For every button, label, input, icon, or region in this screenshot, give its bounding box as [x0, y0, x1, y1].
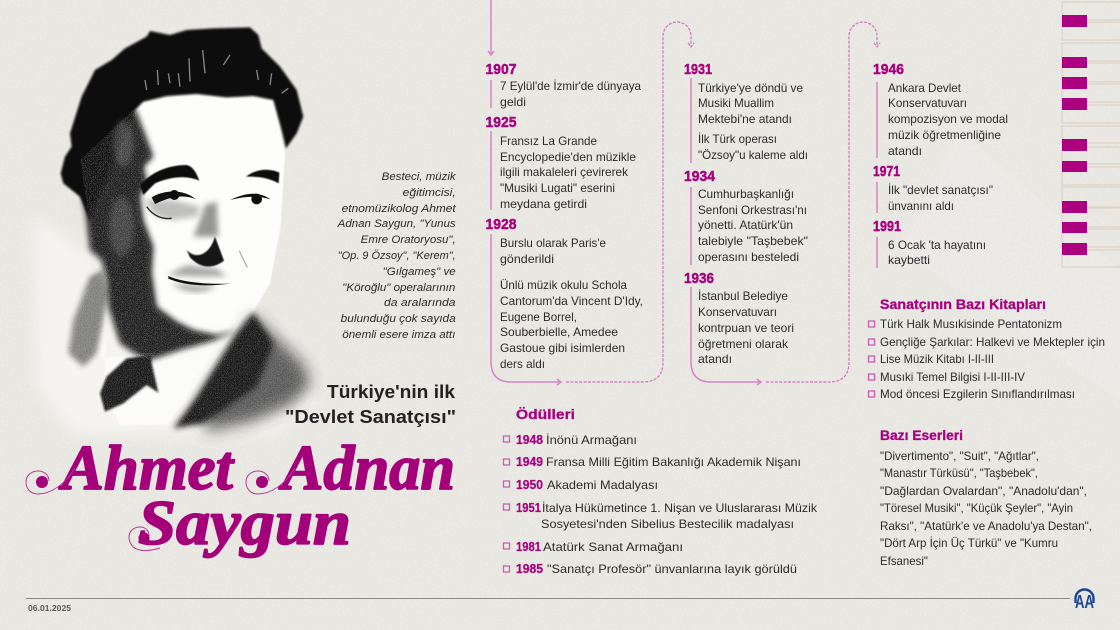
panel: awards: 1948: [516, 433, 543, 447]
timeline column 1: 1928: [486, 216, 516, 233]
timeline column 1: 1907: [486, 61, 516, 78]
panel: awards: 1985: [516, 562, 543, 576]
timeline column 1: Burslu olarak Paris'e: [500, 237, 606, 250]
panel: awards: İnönü Armağanı: [546, 434, 637, 447]
timeline column 1: Cantorum'da Vincent D'Idy,: [500, 295, 643, 308]
grain on shaded head side: [80, 108, 233, 360]
timeline connector arrows: [488, 0, 880, 385]
hair: [61, 27, 303, 220]
grain on jacket: [66, 267, 316, 430]
panel: works: "Dört Arp İçin Üç Türkü" ve "Kumru: [880, 537, 1058, 550]
timeline column 2: İlk Türk operası: [698, 133, 777, 146]
timeline column 3: Konservatuvarı: [888, 97, 967, 110]
face shading: [193, 202, 218, 237]
main title: Adnan: [278, 433, 455, 503]
panel: awards: Akademi Madalyası: [547, 479, 658, 492]
face light: [133, 92, 285, 340]
introduction paragraph: Besteci, müzik: [382, 171, 456, 183]
timeline column 1: Gastoue gibi isimlerden: [500, 342, 625, 355]
panel: awards: İtalya Hükümetince 1. Nişan ve Uluslararası Müzik: [542, 502, 817, 515]
panel: awards: [504, 406, 817, 576]
timeline column 3: 1946: [873, 61, 904, 78]
panel: books: Gençliğe Şarkılar: Halkevi ve Mektepler için: [880, 336, 1105, 349]
timeline column 1: Fransız La Grande: [500, 135, 597, 148]
introduction paragraph: bulunduğu çok sayıda: [341, 313, 456, 325]
works heading: Bazı Eserleri: [880, 427, 963, 443]
timeline column 2: İstanbul Belediye: [698, 290, 788, 303]
timeline column 3: 1991: [873, 218, 901, 235]
panel: books: Türk Halk Musıkisinde Pentatonizm: [880, 318, 1062, 331]
timeline column 2: Cumhurbaşkanlığı: [698, 188, 794, 201]
timeline column 2: 1936: [684, 270, 714, 287]
panel: books: [868, 296, 1105, 401]
panel: awards: Fransa Milli Eğitim Bakanlığı Akademik Nişanı: [546, 456, 801, 469]
timeline column 3: Ankara Devlet: [888, 82, 962, 95]
timeline column 3: [873, 61, 1008, 267]
timeline column 3: 1971: [873, 163, 900, 180]
shirt and collar: [97, 297, 237, 425]
subtitle: Türkiye'nin ilk: [327, 382, 456, 402]
timeline column 2: Mektebi'ne atandı: [698, 113, 792, 126]
main title: Saygun: [138, 488, 351, 558]
panel: works: "Dağlardan Ovalardan", "Anadolu'dan",: [880, 485, 1087, 498]
timeline column 1: "Musiki Lugati" eserini: [500, 182, 615, 195]
timeline column 1: Souberbielle, Amedee: [500, 326, 618, 339]
introduction paragraph: "Gılgameş" ve: [383, 266, 456, 278]
timeline column 2: 1934: [684, 168, 716, 185]
books heading: Sanatçının Bazı Kitapları: [880, 296, 1046, 312]
timeline column 1: ders aldı: [500, 358, 545, 371]
timeline column 1: Ünlü müzik okulu Schola: [500, 279, 628, 292]
awards heading: Ödülleri: [516, 406, 575, 422]
timeline column 2: kontrpuan ve teori: [698, 322, 794, 335]
icon: AA logo: [1075, 590, 1094, 612]
jacket right: [200, 315, 312, 432]
halo around shoulders: [33, 217, 317, 433]
timeline column 2: "Özsoy"u kaleme aldı: [698, 149, 808, 162]
timeline column 2: [684, 61, 808, 366]
panel: works: "Manastır Türküsü", "Taşbebek",: [880, 467, 1038, 480]
main title: [26, 433, 455, 558]
introduction paragraph: "Op. 9 Özsoy", "Kerem",: [338, 250, 456, 262]
introduction paragraph: [337, 171, 457, 341]
introduction paragraph: etnomüzikolog Ahmet: [342, 203, 457, 215]
timeline column 1: 7 Eylül'de İzmir'de dünyaya: [500, 80, 642, 93]
timeline column 2: operasını besteledi: [698, 251, 799, 264]
timeline column 2: Türkiye'ye döndü ve: [698, 82, 803, 95]
introduction paragraph: Emre Oratoryosu",: [361, 234, 456, 246]
side of head and neck shadow: [77, 108, 237, 360]
timeline column 2: Senfoni Orkestrası'nı: [698, 204, 807, 217]
panel: awards: 1950: [516, 478, 543, 492]
timeline column 1: geldi: [500, 96, 526, 109]
panel: awards: "Sanatçı Profesör" ünvanlarına layık görüldü: [547, 563, 797, 576]
timeline column 3: İlk "devlet sanatçısı": [888, 184, 993, 197]
timeline column 2: 1931: [684, 61, 712, 78]
subtitle: "Devlet Sanatçısı": [285, 407, 456, 427]
facial features and hair highlights: [140, 50, 288, 285]
timeline column 1: gönderildi: [500, 253, 554, 266]
footer rule: [26, 598, 1070, 599]
timeline column 3: müzik öğretmenliğine: [888, 129, 1001, 142]
panel: works: [880, 427, 1092, 568]
timeline column 3: ünvanını aldı: [888, 200, 954, 213]
timeline column 3: kaybetti: [888, 254, 930, 267]
introduction paragraph: önemli esere imza attı: [342, 329, 455, 341]
panel: works: "Divertimento", "Suit", "Ağıtlar",: [880, 450, 1039, 463]
panel: works: Efsanesi": [880, 555, 928, 568]
panel: works: Raksı", "Atatürk'e ve Anadolu'ya Destan",: [880, 520, 1092, 533]
timeline column 2: yönetti. Atatürk'ün: [698, 219, 793, 232]
timeline column 2: atandı: [698, 353, 732, 366]
timeline column 3: kompozisyon ve modal: [888, 113, 1008, 126]
timeline column 2: Konservatuvarı: [698, 306, 777, 319]
panel: books: Musıki Temel Bilgisi I-II-III-IV: [880, 371, 1025, 384]
timeline column 1: meydana getirdi: [500, 198, 587, 211]
timeline column 3: 6 Ocak 'ta hayatını: [888, 239, 986, 252]
timeline column 3: atandı: [888, 145, 922, 158]
piano keys decoration: [1062, 2, 1120, 267]
portrait photograph: [33, 27, 340, 433]
timeline column 1: Eugene Borrel,: [500, 311, 577, 324]
icon: AA logo: AA: [1075, 592, 1094, 612]
timeline column 1: Encyclopedie'den müzikle: [500, 151, 636, 164]
timeline column 1: 1925: [486, 114, 516, 131]
timeline column 2: talebiyle "Taşbebek": [698, 235, 808, 248]
subtitle: [285, 382, 456, 427]
introduction paragraph: da aralarında: [384, 297, 456, 309]
panel: awards: 1951: [516, 501, 541, 515]
main title: Ahmet: [58, 433, 235, 503]
introduction paragraph: eğitimcisi,: [403, 187, 456, 199]
timeline column 2: Musiki Muallim: [698, 97, 774, 110]
panel: works: "Töresel Musiki", "Küçük Şeyler", "Ayin: [880, 502, 1073, 515]
panel: awards: 1949: [516, 455, 543, 469]
date: 06.01.2025: [28, 603, 71, 613]
tie: [100, 355, 158, 412]
panel: awards: Atatürk Sanat Armağanı: [543, 541, 683, 554]
jacket left: [68, 270, 108, 367]
panel: books: Mod öncesi Ezgilerin Sınıflandırılması: [880, 388, 1075, 401]
timeline column 1: ilgili makaleleri çevirerek: [500, 166, 628, 179]
timeline column 2: öğretmeni olarak: [698, 338, 788, 351]
introduction paragraph: Adnan Saygun, "Yunus: [337, 218, 456, 230]
panel: awards: Sosyetesi'nden Sibelius Bestecilik madalyası: [541, 518, 794, 531]
panel: books: Lise Müzik Kitabı I-II-III: [880, 353, 994, 366]
panel: awards: 1981: [516, 540, 541, 554]
timeline column 1: [486, 61, 643, 371]
introduction paragraph: "Köroğlu" operalarının: [342, 282, 455, 294]
